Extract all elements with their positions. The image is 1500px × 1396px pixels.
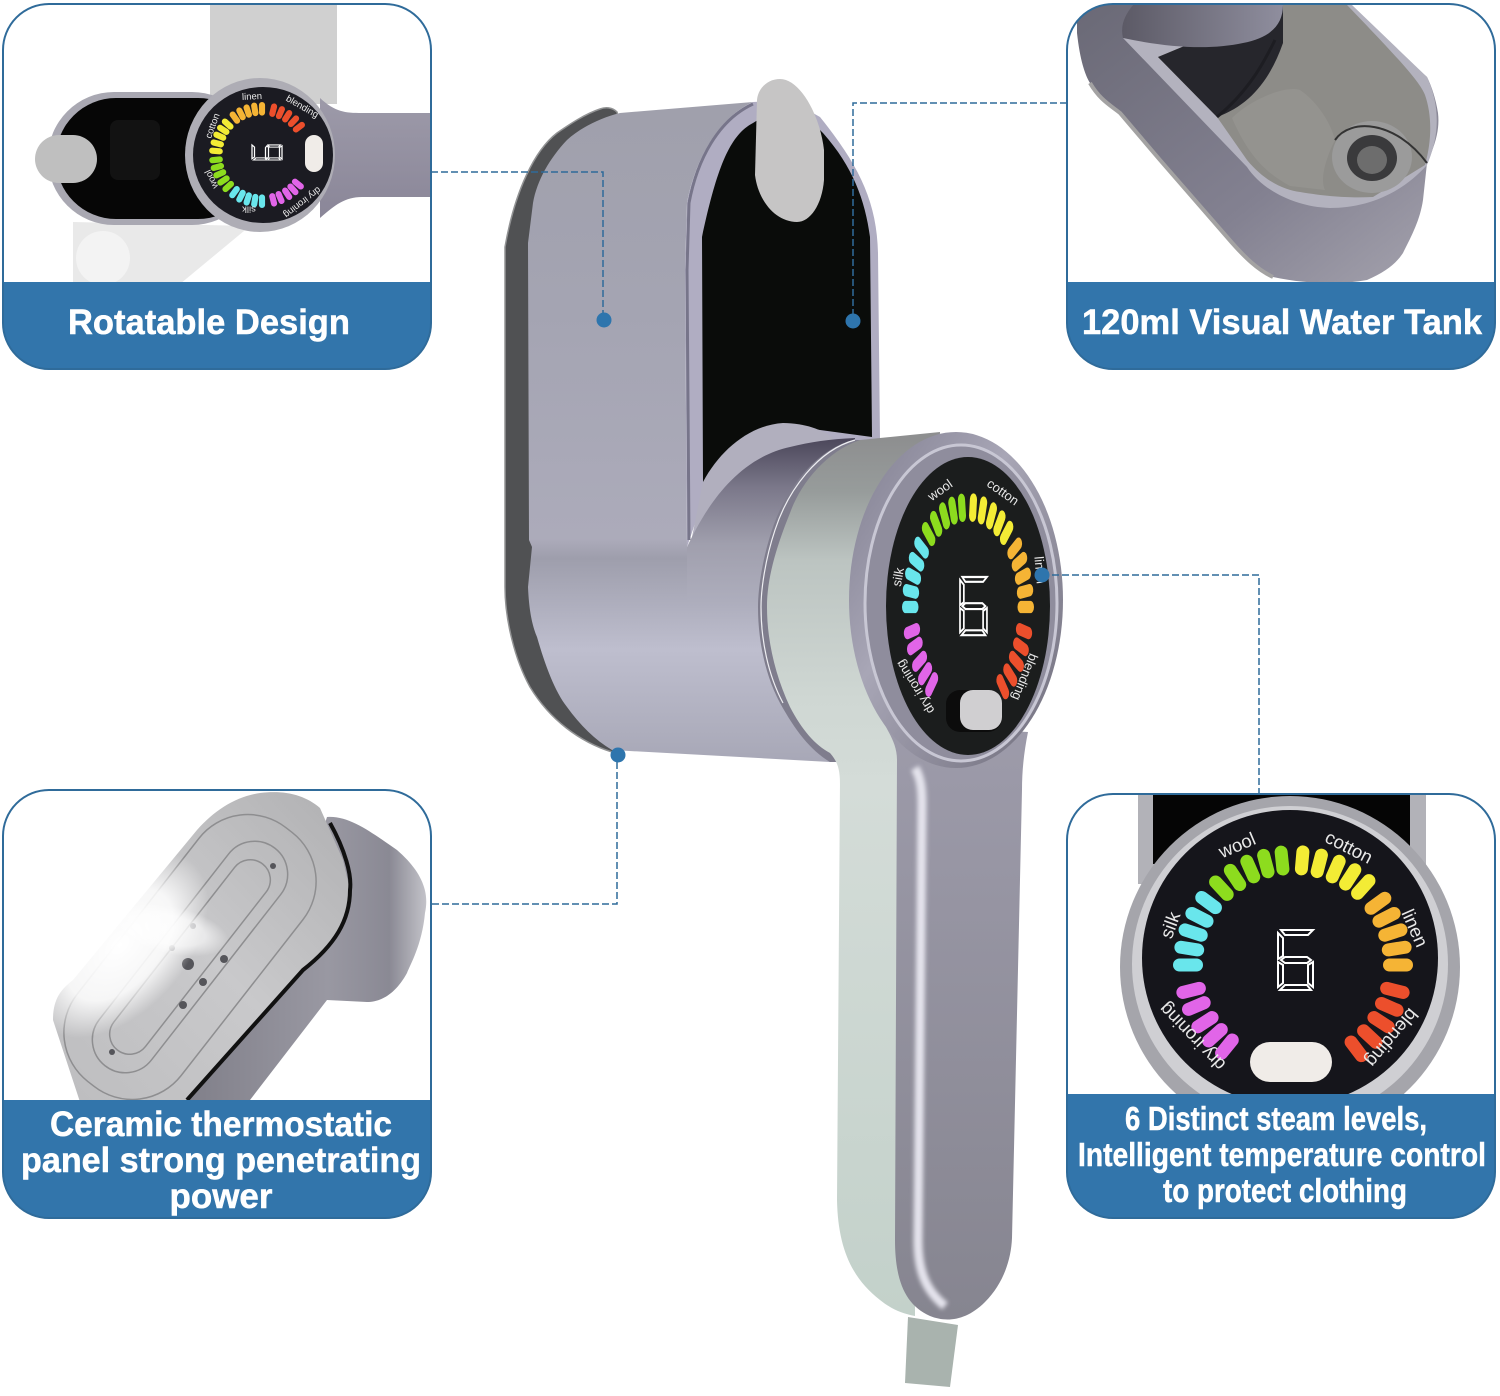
rotatable photo: wool <box>203 168 222 191</box>
panel: ceramic thermostatic panel <box>0 789 431 1218</box>
dial labels: silk <box>889 566 907 588</box>
neck disc <box>690 423 850 547</box>
dial labels <box>889 476 1049 717</box>
frame dark line <box>687 104 753 540</box>
rotatable photo: blending <box>284 93 320 121</box>
panel border <box>1067 794 1495 1218</box>
dial close-up photo: wool <box>1214 828 1259 862</box>
caption band <box>3 1100 431 1218</box>
mint handle back <box>837 780 915 1316</box>
grey handle front <box>885 725 1028 1319</box>
connector: water tank <box>846 103 1067 328</box>
ceramic plate photo <box>53 792 426 1100</box>
steamer back edge <box>505 108 640 752</box>
caption: steam levels: to protect clothing <box>1163 1172 1407 1209</box>
caption band <box>1067 282 1495 369</box>
collar shadow strip <box>758 440 880 762</box>
connector: steam levels <box>1034 568 1259 794</box>
dial labels: blending <box>1009 651 1041 703</box>
panel border <box>3 4 431 369</box>
panel: water tank <box>1067 4 1495 369</box>
panel border <box>1067 4 1495 369</box>
dial button <box>946 690 1002 732</box>
dial close-up photo <box>1120 795 1460 1094</box>
rotatable photo: dry ironing <box>281 184 323 220</box>
caption: ceramic panel: power <box>170 1177 273 1216</box>
collar highlight <box>761 440 855 703</box>
connector: ceramic panel <box>432 748 626 904</box>
dial close-up photo: silk <box>1156 908 1185 941</box>
handle highlight <box>915 768 945 1306</box>
connector: rotatable design <box>431 172 612 328</box>
panel: rotatable design <box>3 4 431 369</box>
dial digit 6 <box>960 577 987 635</box>
rotatable photo <box>3 4 431 285</box>
panel: steam levels <box>1067 794 1495 1218</box>
dial labels: wool <box>924 476 955 504</box>
dial labels: cotton <box>984 476 1022 508</box>
window frame <box>685 100 880 547</box>
dial ring highlight <box>865 445 1057 761</box>
panel border <box>3 790 431 1218</box>
dial labels: dry ironing <box>893 657 937 717</box>
dial close-up photo: dry ironing <box>1154 999 1230 1075</box>
caption band <box>1067 1094 1495 1218</box>
caption: rotatable design: Rotatable Design <box>68 303 350 342</box>
caption: ceramic panel: Ceramic thermostatic <box>50 1105 392 1144</box>
dial face <box>886 457 1050 755</box>
rotatable photo: silk <box>242 204 256 214</box>
dial close-up photo: cotton <box>1322 826 1376 868</box>
rotatable photo: cotton <box>203 112 223 140</box>
hanger knob <box>755 79 824 222</box>
caption: ceramic panel: panel strong penetrating <box>21 1141 421 1180</box>
caption band <box>3 282 431 369</box>
caption: water tank: 120ml Visual Water Tank <box>1082 303 1483 342</box>
dial assembly <box>849 432 1063 768</box>
dial colour segments <box>903 495 1033 699</box>
black window <box>702 100 872 482</box>
rotatable photo: linen <box>242 91 262 103</box>
dial close-up photo: blending <box>1361 1004 1423 1072</box>
mint collar <box>767 432 940 785</box>
power cord <box>905 1317 958 1387</box>
steamer silver body <box>528 102 830 762</box>
caption: ceramic panel <box>21 1105 421 1216</box>
caption: steam levels: 6 Distinct steam levels, <box>1125 1100 1427 1137</box>
caption: steam levels <box>1078 1100 1486 1209</box>
main product: handheld steamer <box>505 79 1063 1387</box>
water tank photo <box>1077 5 1438 282</box>
dial labels: linen <box>1031 556 1049 584</box>
dial ring <box>849 432 1063 768</box>
dial close-up photo: linen <box>1397 906 1433 950</box>
neck <box>687 438 855 600</box>
